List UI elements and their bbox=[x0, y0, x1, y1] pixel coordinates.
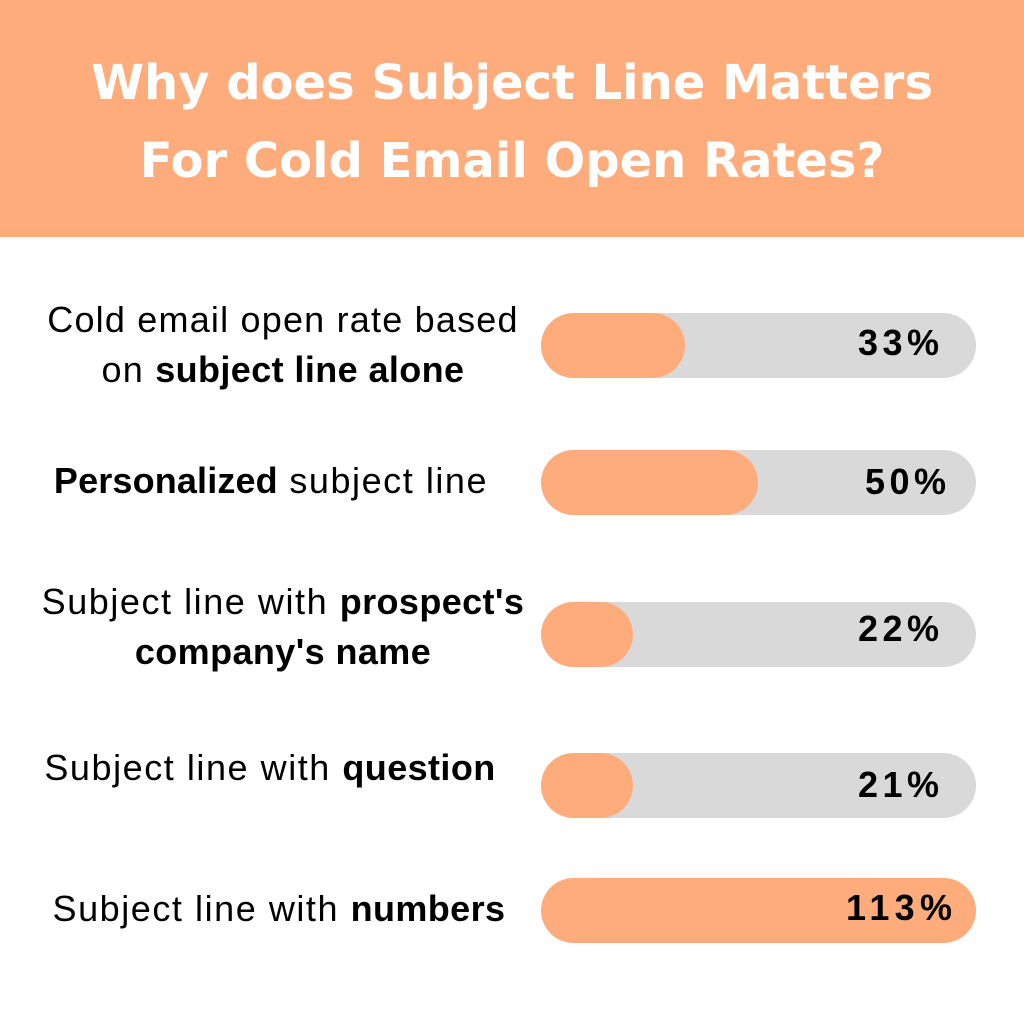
bar fill: 113% bbox=[541, 878, 976, 943]
label: company name bbox=[42, 581, 524, 672]
bar fill: 33% bbox=[541, 313, 685, 378]
label: subject line alone: on subject line alone bbox=[102, 349, 464, 390]
label: numbers: Subject line with numbers bbox=[53, 888, 505, 929]
bar fill: 22% bbox=[541, 602, 633, 667]
bar track: 21% bbox=[541, 753, 976, 818]
bar fill: 50% bbox=[541, 450, 758, 515]
bar track: 50% bbox=[541, 450, 976, 515]
value: 22%: 22% bbox=[858, 608, 944, 649]
label: company name: Subject line with prospect's bbox=[42, 581, 524, 622]
title line 1: Why does Subject Line Matters bbox=[91, 55, 933, 111]
bar track: 33% bbox=[541, 313, 976, 378]
value: 113%: 113% bbox=[846, 887, 957, 928]
bar fill: 21% bbox=[541, 753, 633, 818]
bar track: 22% bbox=[541, 602, 976, 667]
value: 21%: 21% bbox=[858, 764, 944, 805]
label: personalized: Personalized subject line bbox=[54, 460, 488, 501]
value: 33%: 33% bbox=[858, 322, 944, 363]
label: company name: company's name bbox=[135, 631, 431, 672]
header banner bbox=[0, 0, 1024, 237]
label: subject line alone bbox=[47, 299, 519, 390]
label: question: Subject line with question bbox=[44, 747, 496, 788]
label: subject line alone: Cold email open rate based bbox=[47, 299, 519, 340]
value: 50%: 50% bbox=[865, 461, 951, 502]
title line 2: For Cold Email Open Rates? bbox=[140, 133, 884, 189]
